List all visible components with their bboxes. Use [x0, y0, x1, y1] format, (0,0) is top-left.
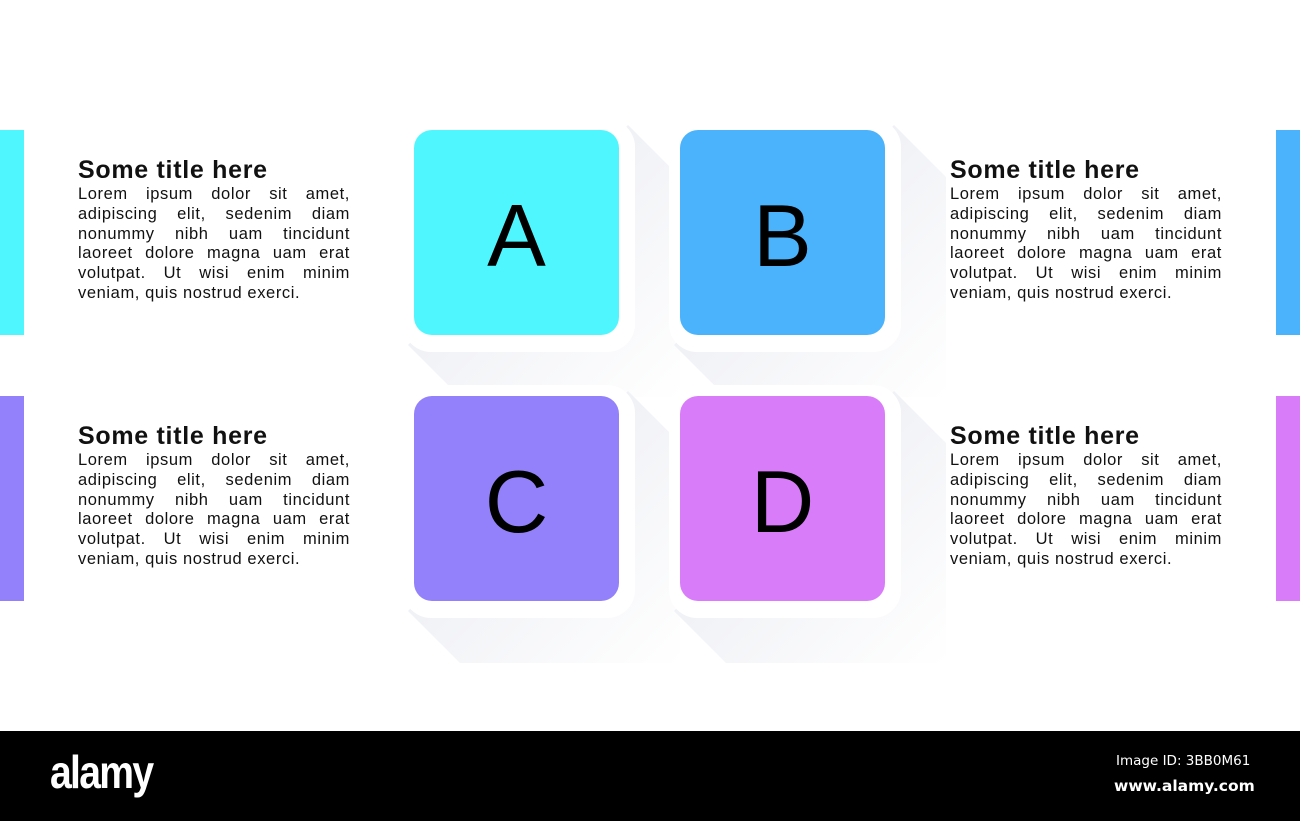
text block D: nonummy nibh uam tincidunt	[950, 491, 1222, 509]
image id: Image ID: 3BB0M61	[1116, 753, 1250, 769]
text block C	[78, 422, 350, 568]
text block C: adipiscing elit, sedenim diam	[78, 471, 350, 489]
text block A: adipiscing elit, sedenim diam	[78, 205, 350, 223]
text block C: veniam, quis nostrud exerci.	[78, 550, 300, 568]
card A	[403, 119, 635, 352]
text block D: Some title here	[950, 422, 1140, 450]
text block C: nonummy nibh uam tincidunt	[78, 491, 350, 509]
card A: A	[487, 186, 546, 284]
text block D: veniam, quis nostrud exerci.	[950, 550, 1172, 568]
card C: C	[485, 452, 548, 550]
text block B: veniam, quis nostrud exerci.	[950, 284, 1172, 302]
text block A: Some title here	[78, 156, 268, 184]
text block A: volutpat. Ut wisi enim minim	[78, 264, 350, 282]
text block C: laoreet dolore magna uam erat	[78, 510, 350, 528]
text block B: nonummy nibh uam tincidunt	[950, 225, 1222, 243]
text block A: laoreet dolore magna uam erat	[78, 244, 350, 262]
text block D: adipiscing elit, sedenim diam	[950, 471, 1222, 489]
card B	[669, 119, 901, 352]
footer	[0, 731, 1300, 821]
text block C: volutpat. Ut wisi enim minim	[78, 530, 350, 548]
text block A	[78, 156, 350, 302]
text block D: volutpat. Ut wisi enim minim	[950, 530, 1222, 548]
text block B: volutpat. Ut wisi enim minim	[950, 264, 1222, 282]
side bar: D	[1276, 396, 1300, 601]
text block C: Some title here	[78, 422, 268, 450]
text block B: laoreet dolore magna uam erat	[950, 244, 1222, 262]
text block D: laoreet dolore magna uam erat	[950, 510, 1222, 528]
card D	[669, 385, 901, 618]
logo: alamy	[50, 746, 152, 798]
text block A: Lorem ipsum dolor sit amet,	[78, 185, 350, 203]
url: www.alamy.com	[1114, 777, 1255, 795]
text block A: veniam, quis nostrud exerci.	[78, 284, 300, 302]
text block D	[950, 422, 1222, 568]
text block B	[950, 156, 1222, 302]
card D: D	[751, 452, 814, 550]
text block B: adipiscing elit, sedenim diam	[950, 205, 1222, 223]
text block A: nonummy nibh uam tincidunt	[78, 225, 350, 243]
text block B: Lorem ipsum dolor sit amet,	[950, 185, 1222, 203]
side bar: B	[1276, 130, 1300, 335]
side bar: C	[0, 396, 24, 601]
card C	[403, 385, 635, 618]
side bar: A	[0, 130, 24, 335]
text block C: Lorem ipsum dolor sit amet,	[78, 451, 350, 469]
text block D: Lorem ipsum dolor sit amet,	[950, 451, 1222, 469]
text block B: Some title here	[950, 156, 1140, 184]
card B: B	[753, 186, 812, 284]
